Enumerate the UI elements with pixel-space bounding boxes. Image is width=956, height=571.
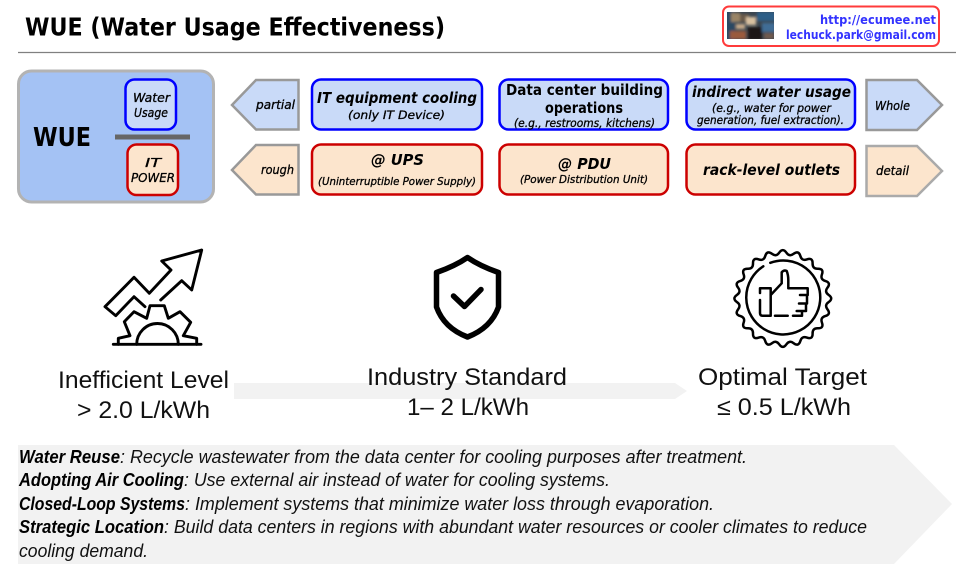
arrow: whole: Whole	[875, 99, 910, 113]
icon: thumbs-up badge	[734, 250, 831, 347]
box: indirect water usage: (e.g., water for power	[712, 101, 832, 115]
numerator: water usage: Usage	[134, 105, 168, 120]
title: WUE (Water Usage Effectiveness)	[25, 12, 445, 42]
box: data center building operations: Data center building	[506, 81, 663, 99]
box: at PDU	[500, 144, 668, 194]
label: optimal target	[698, 364, 867, 421]
strategy: closed-loop: Closed-Loop Systems	[19, 493, 185, 514]
strategy: strategic location	[19, 516, 867, 561]
strategy: strategic location: cooling demand.	[19, 540, 148, 561]
box: IT equipment cooling: IT equipment cooling	[317, 89, 477, 107]
connecting arrow band	[234, 383, 687, 399]
arrow: partial: partial	[255, 98, 296, 112]
label: inefficient level: > 2.0 L/kWh	[77, 397, 210, 424]
label: industry standard: 1– 2 L/kWh	[407, 394, 529, 421]
numerator: water usage	[126, 80, 176, 130]
label: optimal target: Optimal Target	[698, 364, 867, 391]
strategy: water reuse: Water Reuse	[19, 446, 120, 467]
label: industry standard	[367, 364, 567, 421]
numerator: water usage: Water	[133, 90, 171, 105]
strategy: strategic location: : Build data centers in regions with abundant water resources or cooler climates to reduce	[164, 516, 867, 537]
panel: improvement strategies	[18, 445, 952, 564]
denominator: IT power: POWER	[131, 170, 175, 185]
arrow: detail: detail	[876, 164, 910, 178]
box: indirect water usage: indirect water usage	[692, 83, 851, 101]
box: rack-level outlets	[686, 144, 855, 194]
box: data center building operations	[500, 80, 668, 130]
box: data center building operations: operations	[545, 99, 623, 117]
box: data center building operations: (e.g., restrooms, kitchens)	[514, 116, 655, 130]
label: industry standard: Industry Standard	[367, 364, 567, 391]
box: at UPS: @ UPS	[371, 151, 424, 169]
box: at UPS: (Uninterruptible Power Supply)	[318, 175, 476, 188]
WUE label: WUE	[33, 123, 91, 153]
label: optimal target: ≤ 0.5 L/kWh	[717, 394, 851, 421]
contact badge	[723, 6, 939, 46]
logo image	[727, 12, 774, 39]
arrow: rough: rough	[261, 163, 294, 177]
box: IT equipment cooling: (only IT Device)	[348, 108, 445, 122]
label: inefficient level	[58, 367, 229, 424]
label: inefficient level: Inefficient Level	[58, 367, 229, 394]
strategy: closed-loop: : Implement systems that minimize water loss through evaporation.	[185, 493, 714, 514]
contact links	[786, 12, 936, 42]
box: indirect water usage: generation, fuel extraction).	[697, 113, 844, 127]
icon: shield with check	[436, 258, 498, 337]
strategy: air cooling: Adopting Air Cooling	[18, 469, 184, 490]
strategy: air cooling: : Use external air instead of water for cooling systems.	[184, 469, 610, 490]
arrow: partial	[232, 80, 298, 130]
box: at PDU: (Power Distribution Unit)	[520, 173, 648, 186]
denominator: IT power: IT	[145, 155, 163, 170]
box: at UPS	[312, 144, 482, 194]
arrow: whole	[866, 80, 942, 130]
denominator: IT power	[128, 144, 178, 195]
box: indirect water usage	[686, 80, 855, 130]
arrow: rough	[232, 145, 298, 194]
icon: rising arrow and gear	[105, 250, 202, 344]
strategy: water reuse: : Recycle wastewater from the data center for cooling purposes after treatment.	[120, 446, 747, 467]
box: at PDU: @ PDU	[558, 155, 611, 173]
fraction bar	[115, 134, 190, 140]
strategy: strategic location: Strategic Location	[19, 516, 164, 537]
box: IT equipment cooling	[312, 80, 482, 130]
contact links: http://ecumee.net	[820, 12, 936, 27]
box: rack-level outlets: rack-level outlets	[703, 161, 840, 179]
arrow: detail	[866, 146, 942, 196]
panel: WUE formula	[18, 71, 214, 202]
strategy: air cooling	[18, 469, 610, 490]
